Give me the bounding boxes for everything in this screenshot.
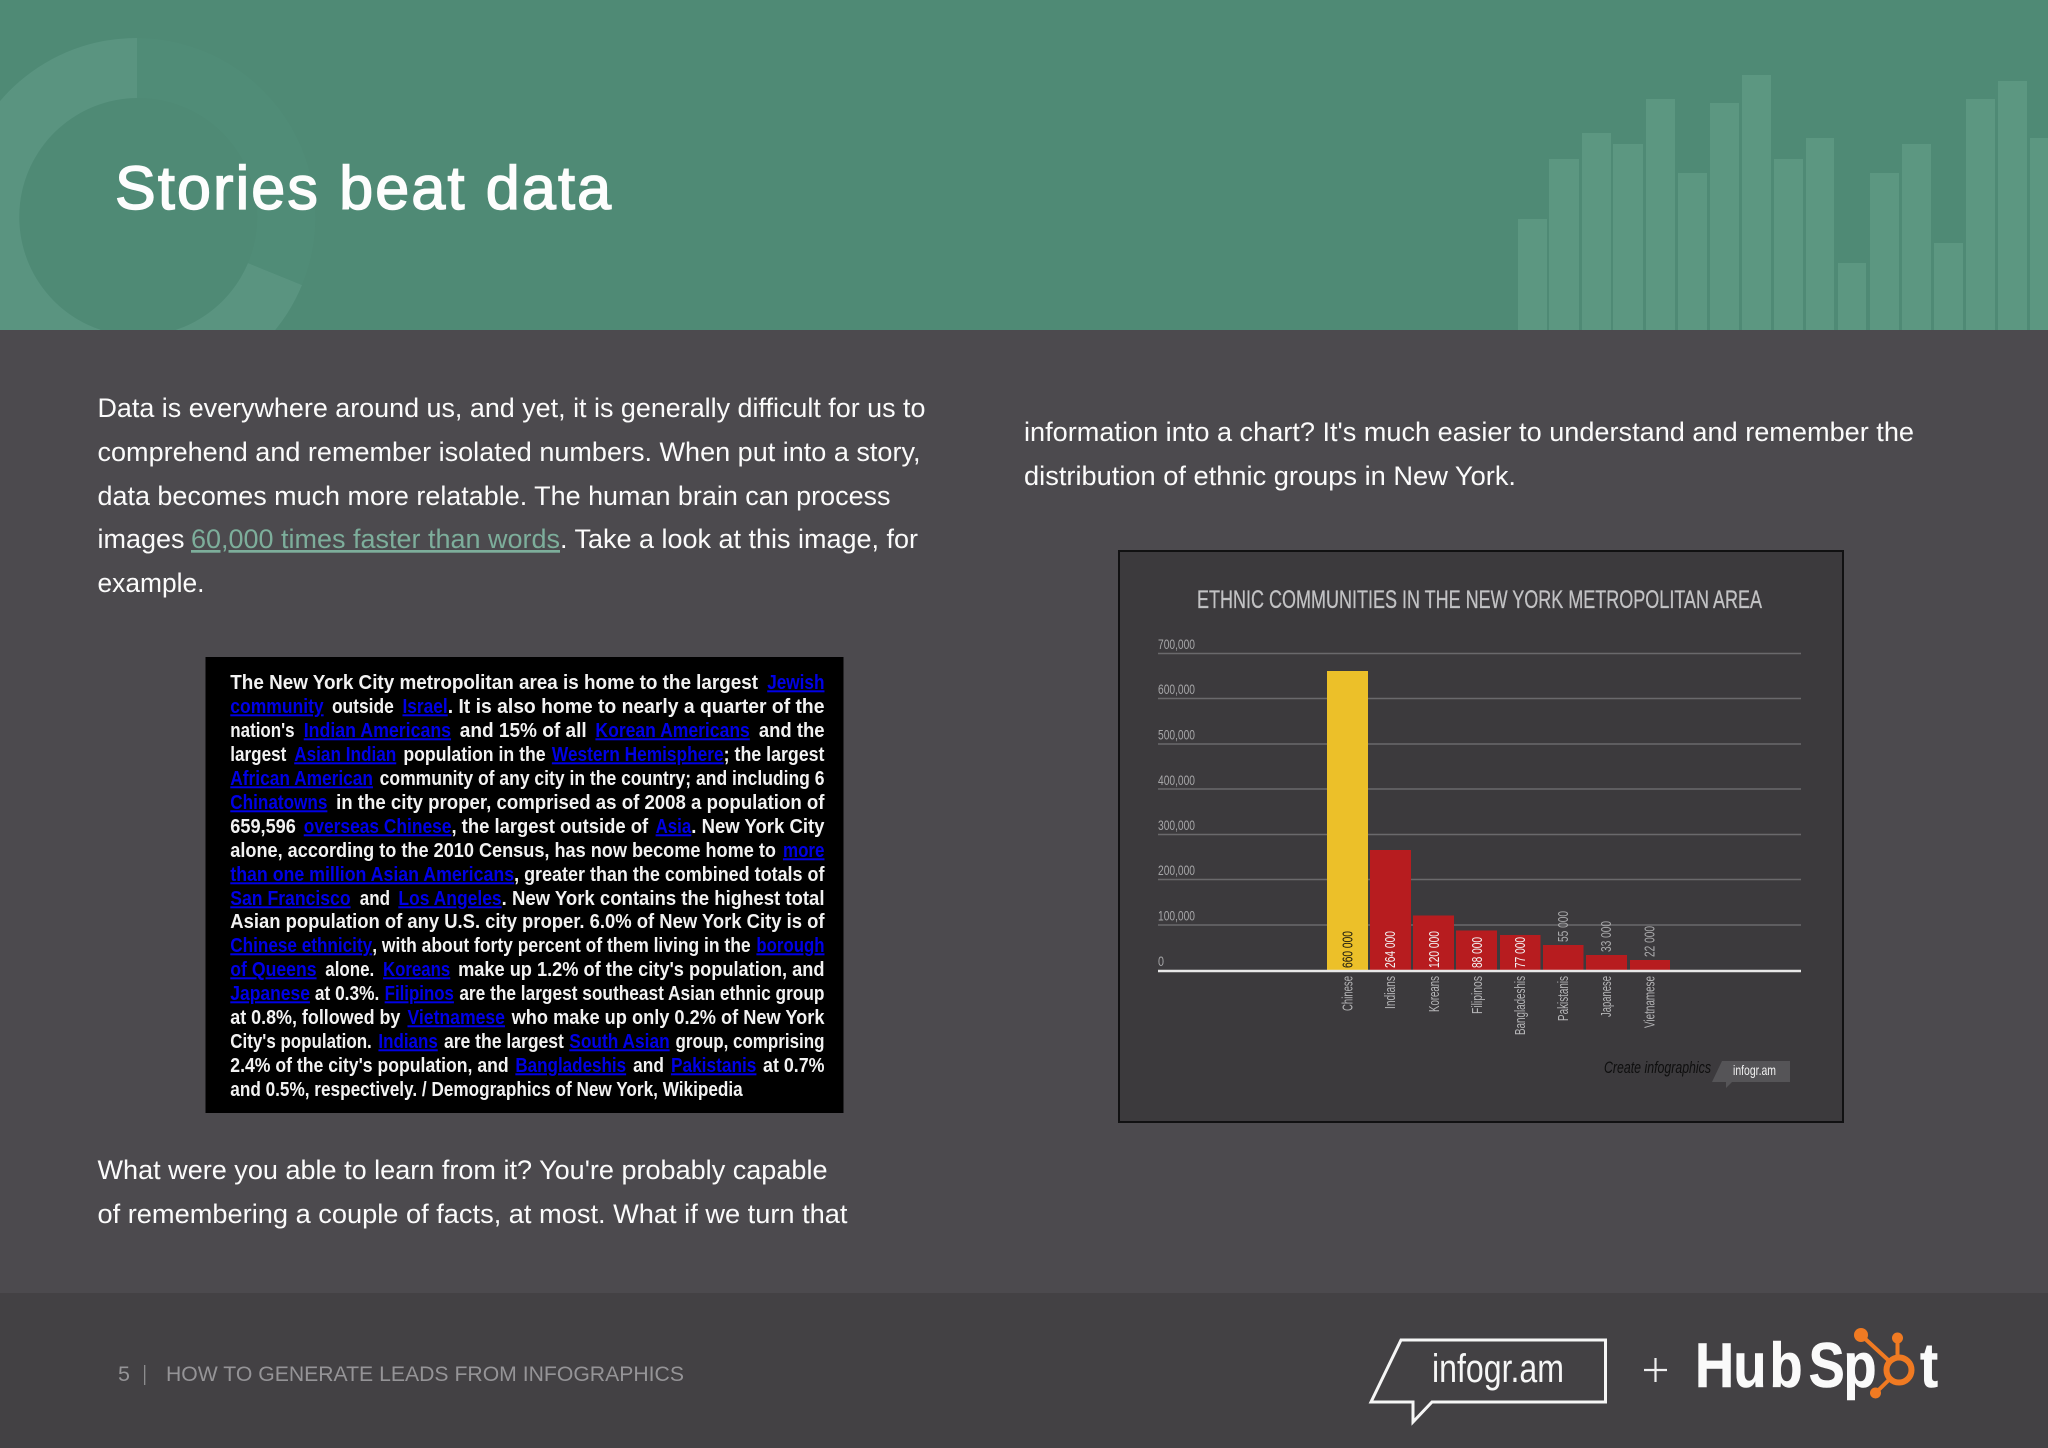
- icon: decorative donut ring: [0, 38, 302, 330]
- panel: wikipedia text screenshot: City's population.: [230, 1031, 372, 1053]
- panel: wikipedia text screenshot: alone, according to the 2010 Census, has now become home to: [230, 840, 776, 862]
- y axis labels: 500,000: [1158, 728, 1195, 742]
- value labels: 55 000: [1556, 911, 1572, 942]
- panel: wikipedia text screenshot: African American: [230, 768, 373, 790]
- logo: infogr.am speech bubble: [1371, 1340, 1606, 1422]
- panel: wikipedia text screenshot: Asia: [656, 816, 692, 838]
- category labels: Vietnamese: [1642, 976, 1658, 1028]
- panel: wikipedia text screenshot: at 0.8%, followed by: [230, 1007, 401, 1029]
- panel: wikipedia text screenshot: Indian Americans: [304, 720, 451, 742]
- panel: wikipedia text screenshot: Western Hemisphere: [552, 744, 724, 766]
- panel: wikipedia text screenshot: San Francisco: [230, 888, 351, 910]
- panel: ethnic communities bar chart: [1119, 551, 1843, 1122]
- panel: wikipedia text screenshot: Vietnamese: [407, 1007, 505, 1029]
- value labels: 120 000: [1427, 931, 1443, 968]
- panel: footer bar: [0, 1293, 2048, 1448]
- text block: question paragraph: [98, 1155, 848, 1229]
- y axis labels: 100,000: [1158, 908, 1195, 924]
- category labels: Koreans: [1427, 976, 1443, 1012]
- chart title: ETHNIC COMMUNITIES IN THE NEW YORK METROPOLITAN AREA: [1197, 586, 1762, 614]
- panel: wikipedia text screenshot: Jewish: [767, 672, 824, 694]
- category labels: Japanese: [1599, 976, 1615, 1017]
- bars: [1327, 671, 1670, 971]
- panel: wikipedia text screenshot: Filipinos: [385, 983, 454, 1005]
- panel: wikipedia text screenshot: [206, 657, 844, 1113]
- panel: wikipedia text screenshot: alone.: [325, 959, 374, 981]
- logo: HubSpot: HubSpot: [1695, 1331, 1938, 1401]
- panel: wikipedia text screenshot: are the largest southeast Asian ethnic group: [459, 983, 824, 1005]
- panel: wikipedia text screenshot: Los Angeles: [398, 888, 502, 910]
- text block: intro paragraph: . Take a look at this image, for: [560, 524, 918, 554]
- y axis labels: [1158, 637, 1195, 969]
- panel: wikipedia text screenshot: and: [360, 888, 390, 910]
- panel: wikipedia text screenshot: Asian Indian: [294, 744, 396, 766]
- y axis labels: 0: [1158, 954, 1164, 969]
- text block: intro paragraph: Data is everywhere around us, and yet, it is generally difficult for us to: [98, 393, 926, 423]
- y axis labels: 400,000: [1158, 773, 1195, 788]
- y axis labels: 600,000: [1158, 682, 1195, 697]
- value labels: 33 000: [1599, 921, 1615, 952]
- panel: wikipedia text screenshot: and 0.5%, respectively. / Demographics of New York, Wikipedia: [230, 1079, 743, 1101]
- panel: wikipedia text screenshot: outside: [332, 696, 394, 718]
- panel: wikipedia text screenshot: Chinatowns: [230, 792, 327, 814]
- panel: wikipedia text screenshot: nation's: [230, 720, 295, 742]
- icon: plus sign: [1644, 1358, 1667, 1382]
- value labels: 660 000: [1340, 931, 1356, 968]
- panel: wikipedia text screenshot: in the city proper, comprised as of 2008 a population of: [336, 792, 826, 814]
- value labels: [1340, 911, 1658, 968]
- panel: wikipedia text screenshot: group, comprising: [676, 1031, 824, 1053]
- value labels: 77 000: [1513, 937, 1529, 968]
- panel: wikipedia text screenshot: population in the: [403, 744, 546, 766]
- logo: infogr.am speech bubble: infogr.am: [1432, 1347, 1564, 1391]
- text block: intro paragraph: 60,000 times faster than words: [191, 524, 560, 554]
- category labels: Filipinos: [1470, 976, 1486, 1014]
- panel: wikipedia text screenshot: The New York City metropolitan area is home to the largest: [230, 672, 758, 694]
- panel: wikipedia text screenshot: Indians: [378, 1031, 438, 1053]
- text block: intro paragraph: comprehend and remember isolated numbers. When put into a story,: [98, 437, 920, 467]
- panel: wikipedia text screenshot: are the largest: [444, 1031, 564, 1053]
- panel: wikipedia text screenshot: Chinese ethnicity: [230, 935, 373, 957]
- category labels: Chinese: [1340, 976, 1356, 1011]
- panel: wikipedia text screenshot: and 15% of all: [460, 720, 587, 742]
- watermark: create infographics tag: infogr.am: [1733, 1062, 1776, 1078]
- text block: intro paragraph: images: [98, 524, 184, 554]
- panel: wikipedia text screenshot: borough: [756, 935, 824, 957]
- panel: wikipedia text screenshot: than one million Asian Americans: [230, 864, 514, 886]
- panel: wikipedia text screenshot: Bangladeshis: [515, 1055, 626, 1077]
- panel: wikipedia text screenshot: Israel: [402, 696, 448, 718]
- watermark: create infographics tag: [1604, 1058, 1790, 1088]
- panel: wikipedia text screenshot: , the largest outside of: [451, 816, 649, 838]
- text block: intro paragraph: data becomes much more relatable. The human brain can process: [98, 481, 890, 511]
- text block: question paragraph: What were you able to learn from it? You're probably capable: [98, 1155, 828, 1185]
- panel: wikipedia text screenshot: and: [633, 1055, 664, 1077]
- text block: continuation paragraph top right: distribution of ethnic groups in New York.: [1024, 461, 1516, 491]
- panel: wikipedia text screenshot: community of any city in the country; and including 6: [380, 768, 824, 790]
- panel: wikipedia text screenshot: at 0.7%: [763, 1055, 825, 1077]
- panel: wikipedia text screenshot: Asian population of any U.S. city proper. 6.0% of New York City is of: [230, 911, 826, 933]
- panel: wikipedia text screenshot: . It is also home to nearly a quarter of the: [448, 696, 824, 718]
- panel: wikipedia text screenshot: more: [783, 840, 824, 862]
- text block: continuation paragraph top right: [1024, 417, 1914, 491]
- icon: decorative bar chart: [1518, 75, 2048, 330]
- panel: wikipedia text screenshot: Pakistanis: [671, 1055, 756, 1077]
- panel: wikipedia text screenshot: ; the largest: [724, 744, 824, 766]
- value labels: 264 000: [1383, 931, 1399, 968]
- panel: wikipedia text screenshot: largest: [230, 744, 286, 766]
- icon: sprocket: [1854, 1328, 1912, 1398]
- category labels: Indians: [1383, 976, 1399, 1009]
- panel: wikipedia text screenshot: overseas Chinese: [304, 816, 451, 838]
- value labels: 88 000: [1470, 937, 1486, 968]
- y axis labels: 200,000: [1158, 863, 1195, 878]
- category labels: Pakistanis: [1556, 976, 1572, 1021]
- category labels: [1340, 976, 1658, 1035]
- panel: wikipedia text screenshot: make up 1.2% of the city's population, and: [458, 959, 824, 981]
- panel: wikipedia text screenshot: Koreans: [383, 959, 450, 981]
- panel: wikipedia text screenshot: at 0.3%.: [315, 983, 379, 1005]
- panel: wikipedia text screenshot: . New York City: [691, 816, 825, 838]
- gridlines: [1158, 654, 1801, 925]
- text block: intro paragraph: [98, 393, 926, 598]
- text block: question paragraph: of remembering a couple of facts, at most. What if we turn that: [98, 1199, 848, 1229]
- panel: header banner: [0, 0, 2048, 330]
- panel: wikipedia text screenshot: . New York contains the highest total: [502, 888, 824, 910]
- category labels: Bangladeshis: [1513, 976, 1529, 1035]
- text block: continuation paragraph top right: information into a chart? It's much easier to understand and remember the: [1024, 417, 1914, 447]
- panel: wikipedia text screenshot: 659,596: [230, 816, 296, 838]
- panel: wikipedia text screenshot: 2.4% of the city's population, and: [230, 1055, 509, 1077]
- panel: wikipedia text screenshot: Japanese: [230, 983, 310, 1005]
- panel: wikipedia text screenshot: and the: [759, 720, 824, 742]
- panel: wikipedia text screenshot: Korean Americans: [595, 720, 750, 742]
- panel: wikipedia text screenshot: of Queens: [230, 959, 317, 981]
- panel: wikipedia text screenshot: South Asian: [569, 1031, 670, 1053]
- panel: wikipedia text screenshot: who make up only 0.2% of New York: [510, 1007, 825, 1029]
- x axis baseline: [1158, 970, 1801, 972]
- y axis labels: 700,000: [1158, 637, 1195, 652]
- page number: 5: [118, 1362, 130, 1386]
- watermark: create infographics tag: Create infographics: [1604, 1058, 1711, 1077]
- panel: wikipedia text screenshot: , with about forty percent of them living in the: [372, 935, 751, 957]
- panel: wikipedia text screenshot: , greater than the combined totals of: [514, 864, 826, 886]
- y axis labels: 300,000: [1158, 818, 1195, 833]
- text block: intro paragraph: example.: [98, 568, 204, 598]
- value labels: 22 000: [1642, 926, 1658, 957]
- title: Stories beat data: [115, 154, 611, 222]
- panel: wikipedia text screenshot: community: [230, 696, 324, 718]
- footer caption: HOW TO GENERATE LEADS FROM INFOGRAPHICS: [166, 1362, 684, 1386]
